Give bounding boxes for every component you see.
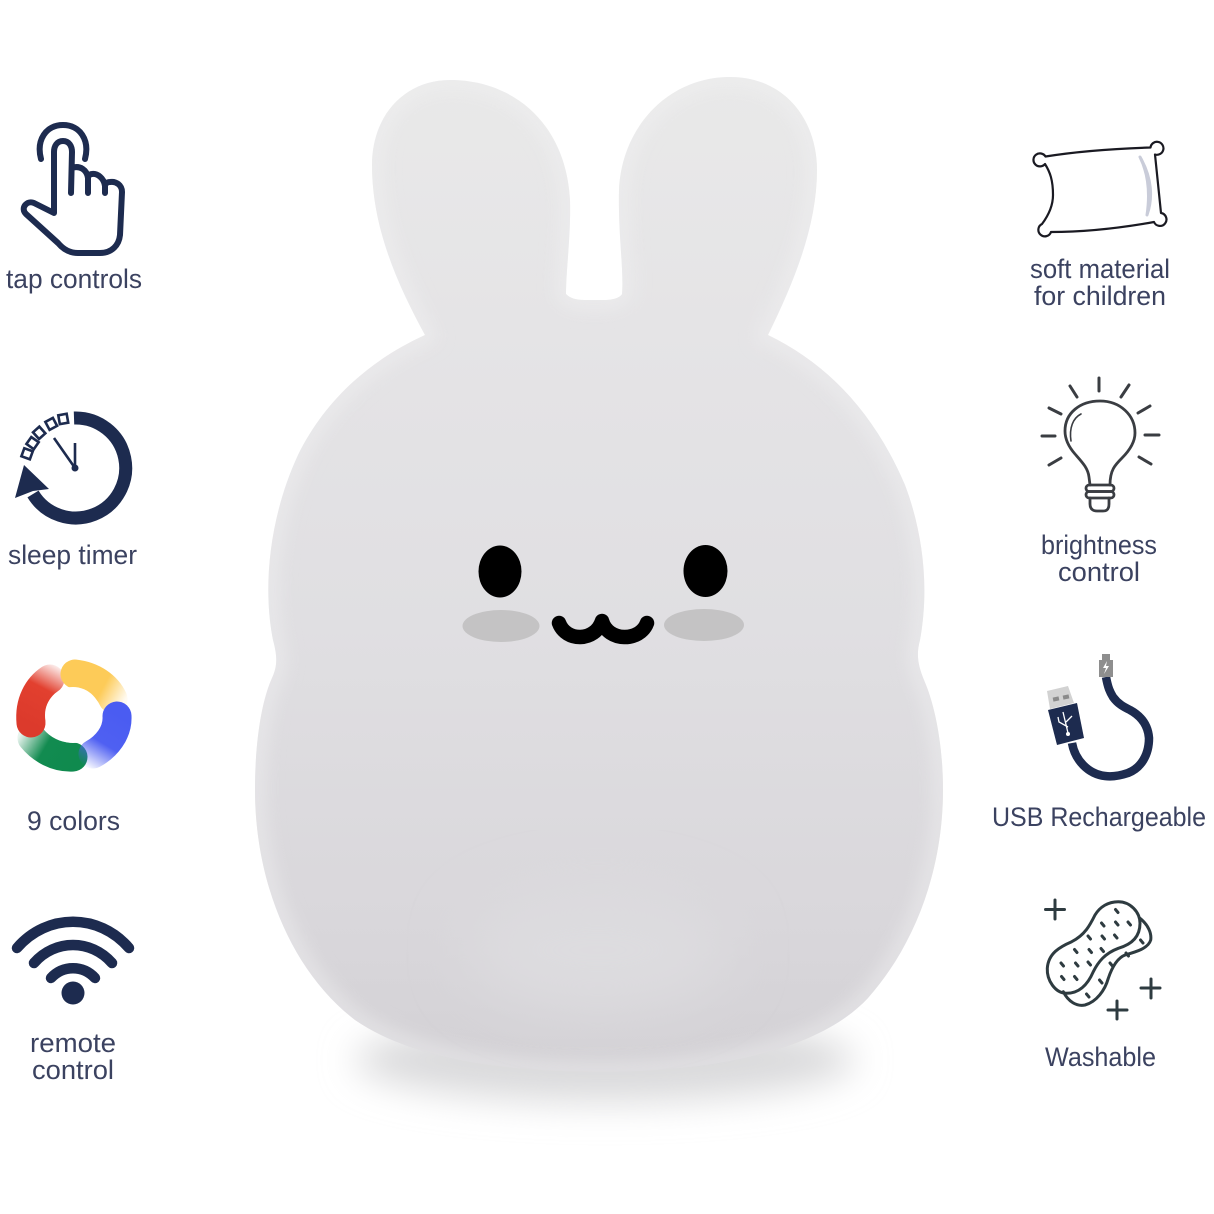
feature: soft material (1030, 142, 1170, 311)
icon: colour ring (31, 674, 117, 757)
feature: tap controls (6, 125, 142, 294)
feature: sleep timer (8, 414, 137, 570)
icon: light bulb (1042, 378, 1159, 511)
label: sleep timer (8, 540, 137, 570)
bunny lamp (255, 77, 943, 1072)
feature: brightness control (1041, 378, 1159, 587)
icon: wifi signal (17, 922, 129, 1004)
feature: 9 colors (27, 674, 120, 836)
right cheek (664, 609, 744, 641)
floor shadow (355, 1018, 855, 1102)
feature: remote control (17, 922, 129, 1085)
mouth (559, 621, 647, 637)
label line 2: control (32, 1055, 114, 1085)
icon: USB cable (1047, 654, 1149, 776)
label: remote (30, 1028, 116, 1058)
label line 2: control (1058, 557, 1140, 587)
label: brightness (1041, 530, 1157, 560)
label line 2: for children (1034, 281, 1166, 311)
feature: USB rechargeable (992, 654, 1206, 832)
right eye (684, 545, 728, 597)
icon: tapping hand (24, 125, 122, 253)
label: Washable (1045, 1042, 1156, 1072)
icon: sponge with sparkles (1046, 900, 1160, 1019)
label: 9 colors (27, 806, 120, 836)
icon: clock with arrow (15, 414, 126, 518)
label: tap controls (6, 264, 142, 294)
left eye (478, 546, 522, 598)
body shading (255, 742, 942, 1072)
label: soft material (1030, 254, 1170, 284)
icon: pillow (1033, 142, 1166, 236)
feature: washable (1045, 900, 1160, 1072)
left cheek (462, 610, 540, 642)
